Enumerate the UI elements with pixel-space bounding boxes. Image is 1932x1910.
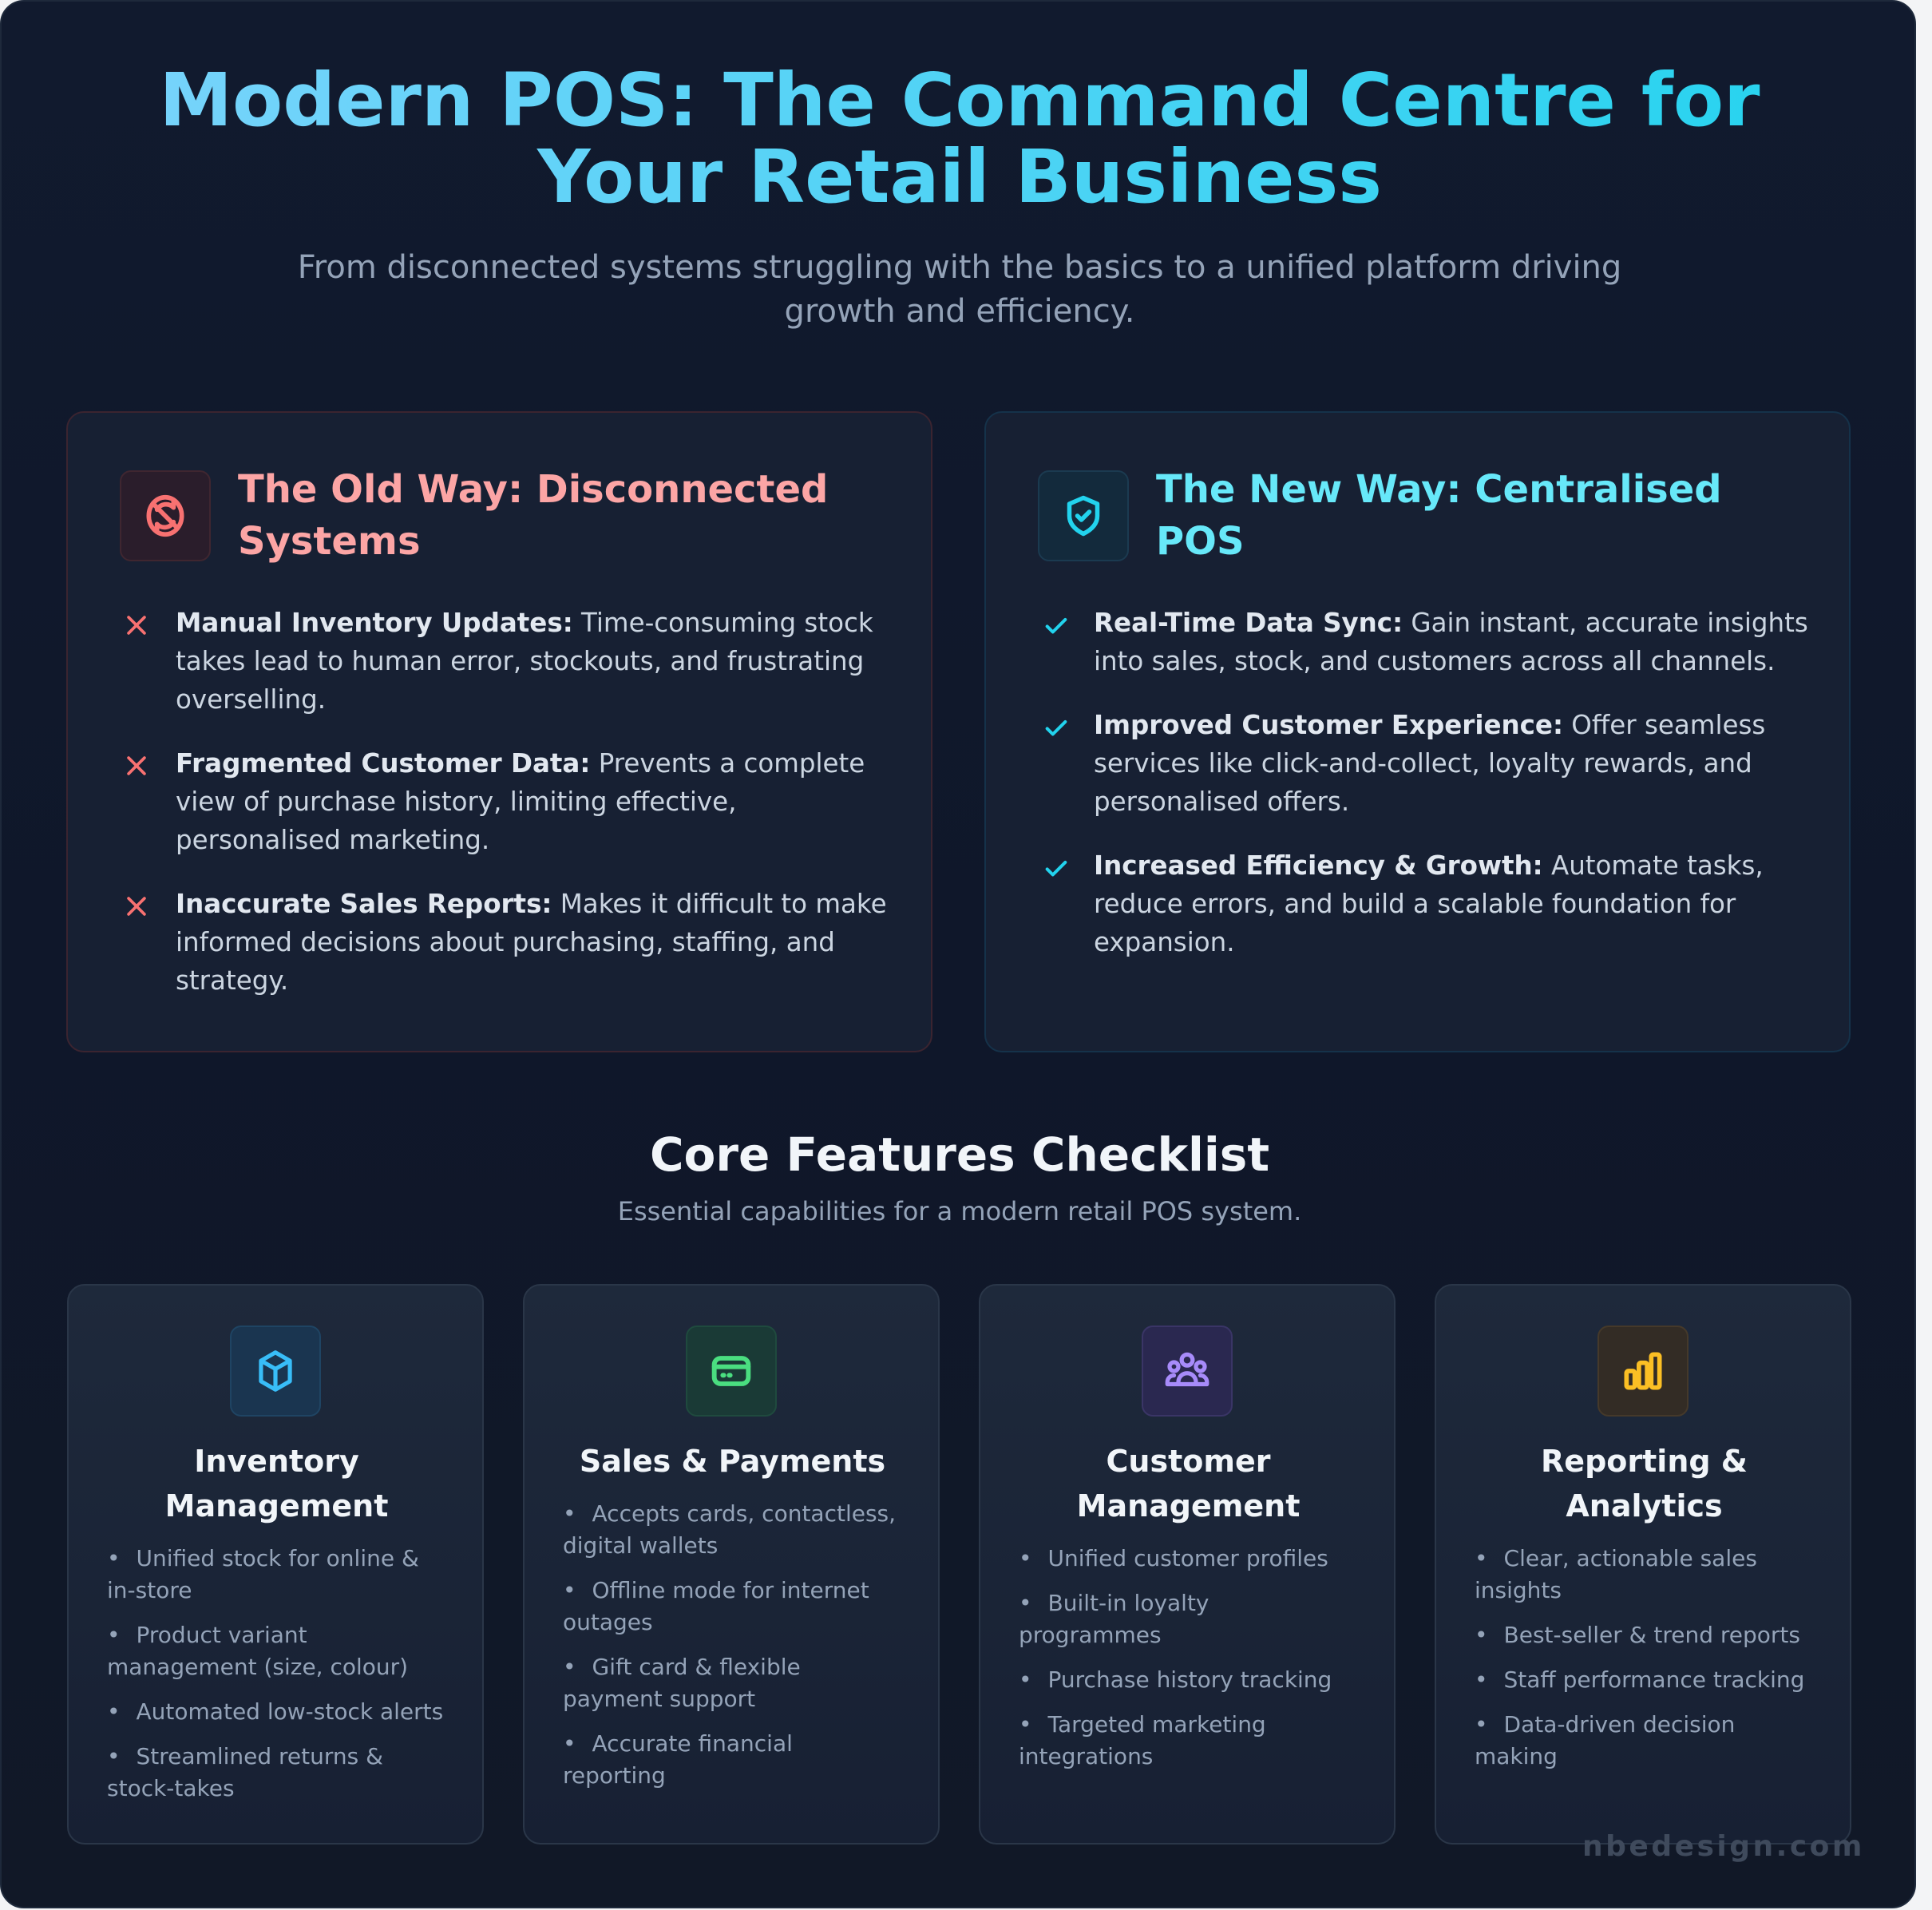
icon: bar chart <box>1597 1326 1689 1417</box>
subtitle: From disconnected systems struggling with the basics to a unified platform driving growth and efficiency. <box>298 249 1621 330</box>
card: reporting <box>1435 1284 1851 1845</box>
card title: Customer <box>1107 1444 1270 1479</box>
card list: Purchase history tracking <box>1048 1666 1332 1693</box>
icon: box <box>230 1326 321 1417</box>
panel title: The New Way: Centralised POS <box>1156 467 1722 564</box>
card list <box>1475 1545 1804 1769</box>
card list <box>1019 1545 1332 1769</box>
title: Your Retail Business <box>537 134 1382 220</box>
card list: Offline mode for internet outages <box>563 1577 869 1635</box>
list: benefits: Improved Customer Experience: Offer seamless services like click-and-collect, loyalty rewards, and personalised offers. <box>1094 710 1765 817</box>
card: sales <box>523 1284 940 1845</box>
card list: Streamlined returns & stock-takes <box>107 1743 383 1801</box>
card title: Reporting & <box>1541 1444 1748 1479</box>
card list: Clear, actionable sales insights <box>1475 1545 1757 1603</box>
card title: Sales & Payments <box>580 1444 885 1479</box>
card list: Gift card & flexible <box>592 1654 801 1680</box>
card title: Analytics <box>1566 1488 1723 1524</box>
card list: Data-driven decision making <box>1475 1711 1735 1769</box>
card title <box>165 1444 388 1524</box>
card list: Product variant management (size, colour) <box>107 1622 408 1680</box>
card list: Best-seller & trend reports <box>1504 1622 1800 1648</box>
card list: Accepts cards, contactless, digital wallets <box>563 1500 896 1559</box>
card title: Management <box>1077 1488 1300 1524</box>
icon: people <box>1142 1326 1233 1417</box>
card title: Inventory <box>194 1444 359 1479</box>
card list: Automated low-stock alerts <box>137 1698 443 1725</box>
card: customer <box>979 1284 1396 1845</box>
list: benefits: Real-Time Data Sync: Gain instant, accurate insights into sales, stock, and customers across all channels. <box>1094 608 1808 676</box>
title <box>2 62 1918 216</box>
card list: Built-in loyalty programmes <box>1019 1590 1209 1648</box>
card list <box>563 1500 896 1789</box>
list: problems: Inaccurate Sales Reports: Makes it difficult to make informed decisions about purchasing, staffing, and strategy. <box>176 889 887 996</box>
list: problems: Manual Inventory Updates: Time-consuming stock takes lead to human error, stockouts, and frustrating overselling. <box>176 608 873 715</box>
icon: card <box>686 1326 777 1417</box>
card list: Accurate financial reporting <box>563 1730 793 1789</box>
list: benefits <box>1046 608 1808 957</box>
card: inventory <box>67 1284 484 1845</box>
card list <box>107 1545 443 1801</box>
panel title: The Old Way: Disconnected Systems <box>238 467 828 564</box>
card list: Unified stock for online & in-store <box>107 1545 419 1603</box>
list: benefits: Increased Efficiency & Growth: Automate tasks, reduce errors, and build a scalable foundation for expansion. <box>1094 850 1764 957</box>
card list: payment support <box>563 1686 755 1712</box>
icon: shield check <box>1038 470 1129 561</box>
icon: broken sync <box>120 470 211 561</box>
card title <box>1541 1444 1748 1524</box>
heading: core features: Core Features Checklist <box>650 1127 1269 1182</box>
panel: old way <box>66 411 932 1052</box>
panel: new way <box>984 411 1851 1052</box>
list: problems <box>127 608 887 996</box>
subheading: Essential capabilities for a modern retail POS system. <box>618 1196 1301 1226</box>
watermark: nbedesign.com <box>1582 1830 1865 1863</box>
card list: Targeted marketing integrations <box>1019 1711 1266 1769</box>
card list: Unified customer profiles <box>1048 1545 1328 1571</box>
title: Modern POS: The Command Centre for <box>160 57 1760 143</box>
card list: Staff performance tracking <box>1504 1666 1804 1693</box>
card title: Management <box>165 1488 388 1524</box>
list: problems: Fragmented Customer Data: Prevents a complete view of purchase history, limiting effective, personalised marketing. <box>176 748 865 855</box>
card title <box>1077 1444 1300 1524</box>
